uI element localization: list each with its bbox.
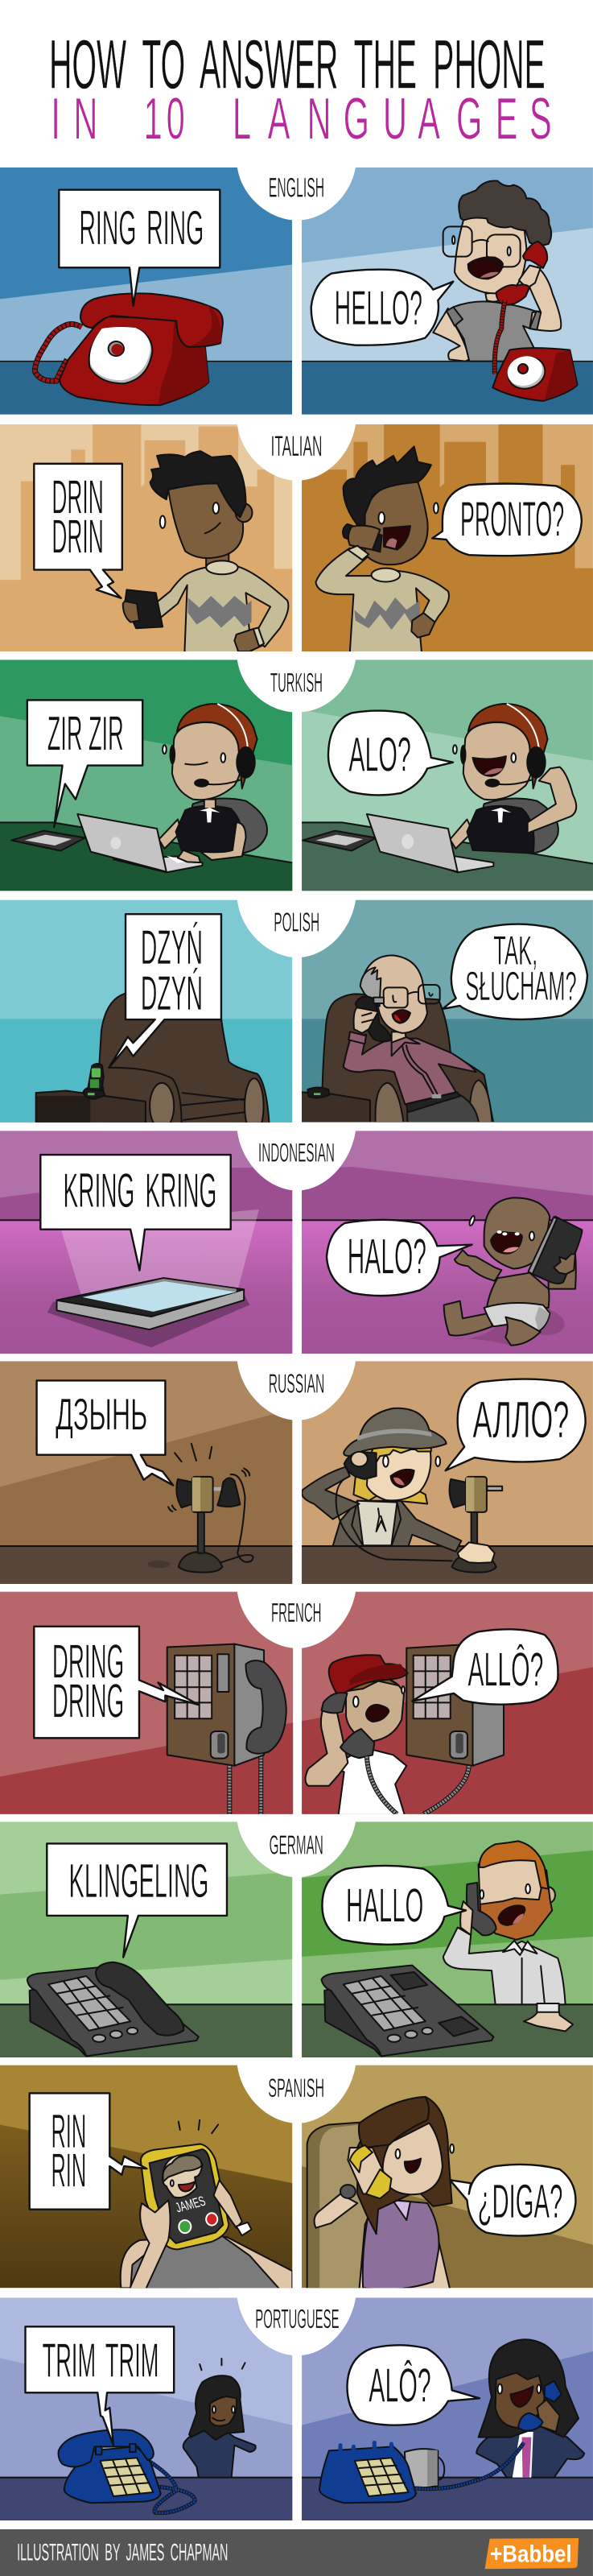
icon: tablet on desk [303,831,377,851]
speech box: KLINGELING [47,1843,227,1958]
title [49,26,552,152]
language tab: ITALIAN [237,423,356,481]
panel: Russian woman with candlestick phone [299,1361,593,1586]
character: woman in background [183,2359,256,2478]
character: man looking at phone [123,451,288,653]
panel: English answering man [300,167,593,418]
panel: Spanish woman [302,2065,593,2289]
language tab: POLISH [237,899,356,957]
speech bubble: TAK, SŁUCHAM? [443,924,587,1019]
panel: Italian man with mobile [0,424,292,653]
speech bubble: ALÔ? [347,2345,480,2425]
speech bubble: HALLO: HALLO [346,1879,423,1933]
language tab: TURKISH [237,659,356,712]
speech box: DRING DRING [34,1627,199,1738]
icon: glowing tablet [47,1209,259,1347]
character: man with glasses [433,180,561,374]
language tab: RUSSIAN [237,1360,356,1420]
icon: cordless phone [83,1064,105,1099]
rows: Polish and Indonesian [0,899,593,1356]
speech bubble: HALO?: HALO? [348,1230,426,1285]
speech box: RING RING: RING RING [79,201,204,255]
icon: candlestick phone [147,1444,253,1573]
speech box: DRING DRING: DRING [52,1635,124,1688]
panel: German desk phone ringing: KLINGELING [69,1854,208,1908]
icon: hands holding yellow smartphone: JAMES [173,2194,208,2215]
icon: tablet on desk [11,831,85,851]
speech box: KRING KRING [40,1155,231,1271]
speech box: RIN RIN [30,2093,146,2210]
scene: Indonesian baby on tablet [327,1197,582,1346]
icon: red rotary phone [35,293,223,405]
speech bubble: HALO? [327,1220,472,1296]
speech box: RING RING [59,190,220,306]
language tab: ENGLISH [237,166,356,220]
speech box: ДЗЫНЬ: ДЗЫНЬ [56,1390,147,1440]
panel: Polish ringing phone and armchair: DZYŃ [141,920,203,974]
language tab: GERMAN: GERMAN [270,1830,323,1860]
panel: Turkish woman at laptop [0,660,295,893]
panel: Portuguese blue phone ringing: TRIM TRIM [43,2334,159,2388]
character: woman in hat [302,1408,461,1561]
speech bubble: PRONTO? [432,484,582,556]
panel: Indonesian ringing tablet: KRING KRING [63,1164,216,1218]
panel: Italian man with mobile: DRIN [51,470,104,524]
character: woman with long hair [315,2097,454,2289]
language tab: SPANISH [237,2064,356,2123]
speech box: DRIN DRIN [34,464,122,598]
row: Portuguese and footer: PORTUGUESE [255,2304,340,2334]
icon: wall pay phone [406,1644,504,1814]
icon: hands holding yellow smartphone [121,2144,292,2289]
panel: Polish ringing phone and armchair: DZYŃ [141,967,203,1021]
language tab: FRENCH: FRENCH [271,1598,322,1627]
panel: German desk phone ringing [0,1821,295,2060]
rows: German and Spanish [0,1821,593,2289]
panel: Turkish woman at laptop: ZIR ZIR [47,707,124,761]
character: bald man with glasses [344,955,479,1123]
speech bubble: ALO?: ALO? [348,728,411,782]
panel: Polish background right [302,900,593,1123]
speech box: ZIR ZIR [27,700,142,827]
panel: German bearded man [299,1821,593,2060]
speech bubble: ALO? [328,711,453,795]
speech bubble: HELLO?: HELLO? [335,280,422,335]
icon: office desk phone [27,1962,199,2056]
icon: coffee mug [405,2449,444,2487]
panel: Polish ringing phone and armchair [0,900,292,1134]
language tab: ENGLISH: ENGLISH [269,172,324,203]
icon: office desk phone [322,1966,493,2056]
language tab: GERMAN [237,1821,356,1877]
language tab: SPANISH: SPANISH [268,2074,324,2103]
speech box: DZYŃ DZYŃ [109,914,221,1068]
panel: Portuguese woman in suit [299,2297,593,2523]
icon: small red phone [492,348,578,401]
panel: French pay phone ringing [0,1592,293,1815]
rows: Polish and Indonesian: INDONESIAN [258,1138,335,1168]
icon: ring marks [179,2120,218,2133]
panel: Portuguese blue phone ringing [0,2297,295,2523]
panel: Italian man answering [302,424,593,653]
panel: Turkish woman answering [299,660,593,893]
character: boy in red cap [306,1655,408,1815]
character: woman on headset [450,704,576,854]
character: man with beard [443,1841,573,2031]
icon: laptop [77,814,202,872]
language tab: RUSSIAN: RUSSIAN [269,1368,324,1399]
icon: chair back [307,2123,378,2289]
icon: blue push-button phone [59,2429,195,2513]
panel: Spanish smartphone ringing [0,2065,292,2289]
speech box: RIN RIN: RIN [51,2144,86,2197]
speech bubble: HELLO? [311,270,453,345]
icon: wall pay phone [167,1644,286,1815]
language tab: INDONESIAN [237,1130,356,1190]
panel: Indonesian ringing tablet [0,1131,295,1356]
rows: Russian and French [0,1360,593,1815]
speech box: RIN RIN: RIN [51,2105,86,2158]
icon: candlestick phone [450,1477,502,1573]
speech bubble: ALLÔ? [412,1629,558,1705]
speech bubble: TAK, SŁUCHAM?: TAK, [493,928,537,974]
rows: Italian and Turkish [0,423,593,893]
language tab: POLISH: POLISH [274,907,319,937]
panel: Russian candlestick phone ringing [0,1361,295,1586]
language tab: TURKISH: TURKISH [270,668,323,697]
speech box: ДЗЫНЬ [37,1380,173,1486]
speech bubble: ¿DIGA? [450,2165,575,2236]
character: woman in suit [476,2339,584,2478]
icon: side table [36,1090,146,1125]
scene: Polish man in armchair [300,924,587,1123]
speech bubble: АЛЛО? [446,1379,586,1470]
language tab: FRENCH [237,1590,356,1648]
panel: Italian man with mobile: DRIN [51,510,104,564]
panel: English ringing phone [0,167,294,418]
icon: armchair and table [300,994,493,1123]
language tab: PORTUGUESE [237,2297,356,2355]
footer [0,2529,593,2576]
character: baby [444,1197,582,1346]
panel: Indonesian background right [299,1131,593,1356]
speech box: DRING DRING: DRING [52,1674,124,1727]
language tab: ITALIAN: ITALIAN [271,432,322,462]
character: man on the phone [315,446,449,653]
speech bubble: HALLO [322,1866,466,1945]
icon: blue push-button phone [319,2442,524,2503]
panel: French boy at pay phone [302,1592,593,1815]
icon: armchair [99,994,270,1134]
speech bubble: ALÔ?: ALÔ? [369,2359,431,2413]
icon: laptop [367,814,493,872]
speech box: TRIM TRIM [25,2326,174,2446]
title line: in 10 languages: IN 10 LANGUAGES [51,85,552,152]
character: woman with headset [159,704,267,860]
row: Portuguese and footer [0,2297,593,2576]
